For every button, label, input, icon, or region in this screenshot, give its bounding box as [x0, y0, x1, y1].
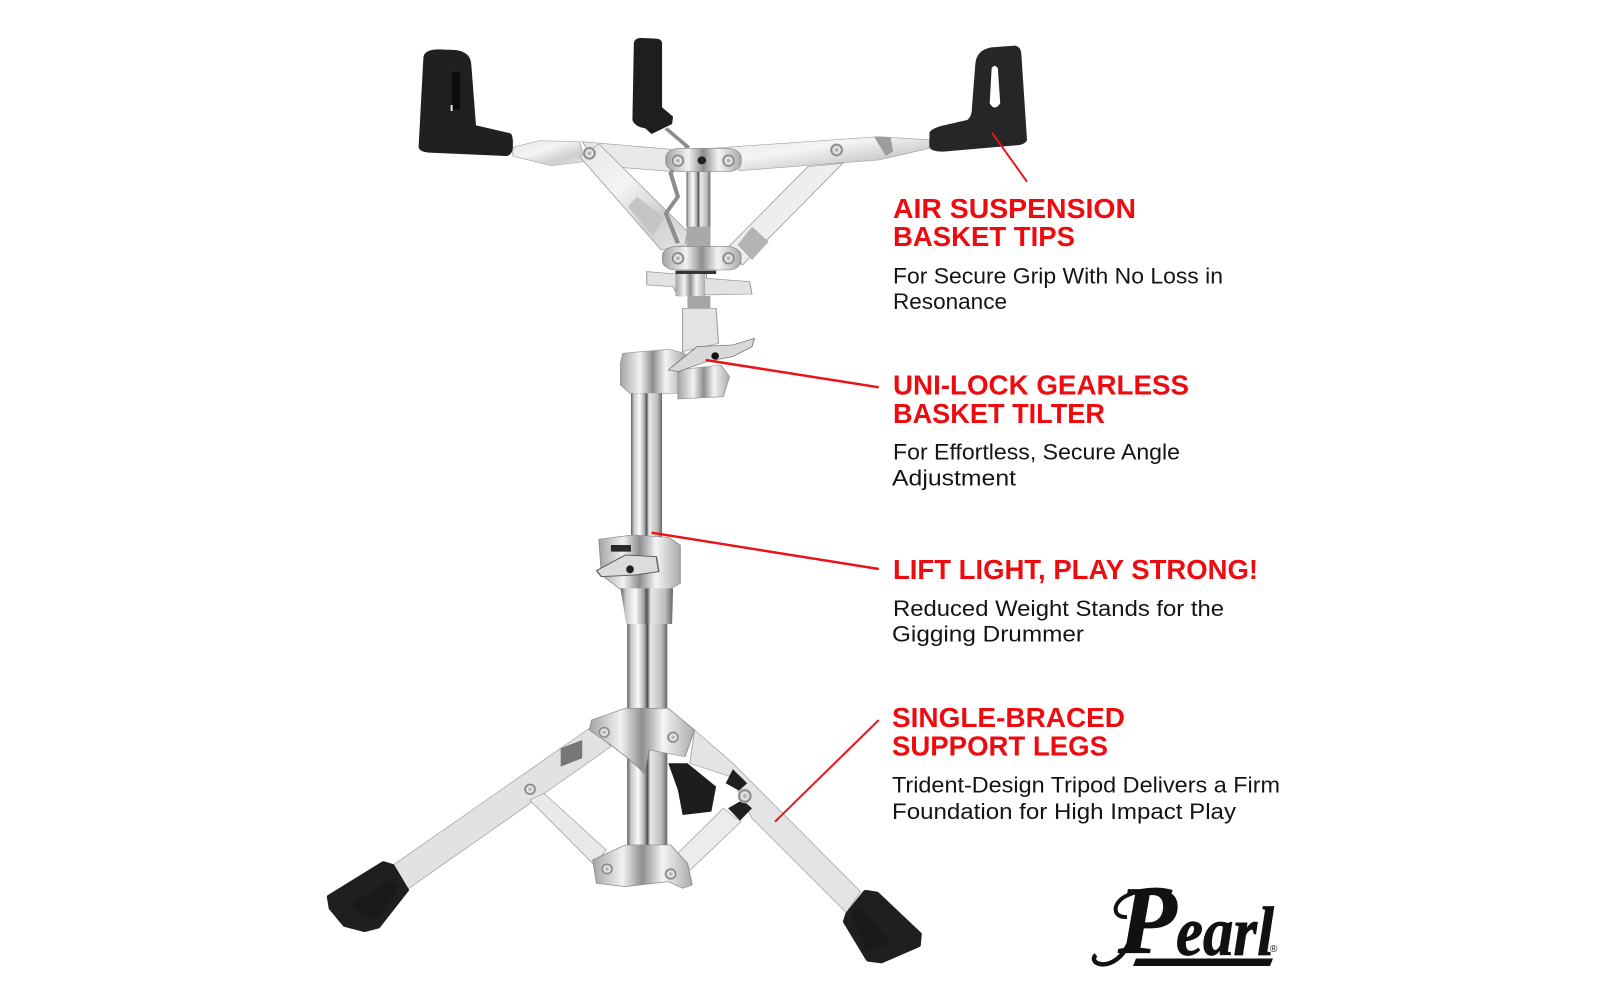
description line 2: Adjustment	[892, 466, 1016, 490]
left tip slot	[452, 72, 460, 110]
logo wordmark: earl	[1176, 894, 1274, 971]
tilter left knob	[620, 349, 685, 393]
right link reflection	[738, 227, 769, 260]
left foot	[330, 863, 406, 930]
back leg rubber tip	[668, 763, 716, 815]
middle basket tip	[632, 38, 673, 134]
Pearl logo	[1094, 867, 1278, 974]
left upper bar	[582, 142, 671, 171]
lower hub	[593, 845, 692, 888]
tilter right knob	[678, 365, 730, 399]
snare stand illustration	[330, 38, 1027, 961]
left basket tip	[419, 49, 513, 156]
callout: air suspension basket tips	[893, 193, 1223, 314]
bottom hub	[663, 247, 741, 270]
clamp bolt hole	[626, 565, 634, 573]
left foot inset	[350, 880, 398, 918]
right foot inset	[850, 908, 891, 950]
heading: UNI-LOCK GEARLESS	[893, 370, 1189, 400]
center post	[686, 170, 710, 248]
description: For Secure Grip With No Loss in	[893, 264, 1223, 288]
description: Reduced Weight Stands for the	[893, 596, 1224, 621]
logo P top swash	[1116, 890, 1172, 917]
description: For Effortless, Secure Angle	[893, 440, 1180, 464]
callout: single-braced support legs	[892, 702, 1280, 824]
registered mark: ®	[1270, 944, 1278, 955]
wing nut dark seam	[675, 271, 716, 274]
tapered collar	[620, 588, 673, 624]
pointer line: tilter	[706, 360, 879, 387]
left basket arm	[513, 141, 585, 166]
callout: lift light play strong	[892, 554, 1258, 646]
right leg	[690, 730, 861, 913]
right basket arm	[711, 137, 929, 171]
tripod bolts	[524, 726, 752, 880]
upper tube	[631, 393, 662, 500]
callout: uni-lock gearless basket tilter	[892, 370, 1189, 490]
bolts	[583, 143, 843, 265]
tilter block	[683, 308, 719, 352]
left leg reflection	[561, 740, 582, 767]
heading: SINGLE-BRACED	[892, 702, 1125, 733]
right basket link	[727, 163, 843, 265]
pointer line: lift light	[652, 533, 879, 569]
tripod hub	[589, 708, 695, 773]
left link reflection	[628, 197, 664, 235]
heading: AIR SUSPENSION	[893, 193, 1136, 224]
right brace	[678, 808, 741, 873]
logo underline bar	[1133, 958, 1273, 966]
threaded rod	[687, 296, 710, 309]
right basket tip	[929, 46, 1027, 152]
stand upper section: basket and tilter	[419, 38, 1027, 500]
heading line 2: SUPPORT LEGS	[892, 730, 1108, 762]
description line 2: Resonance	[893, 289, 1007, 314]
pointer line: basket tips	[992, 133, 1027, 182]
heading: LIFT LIGHT, PLAY STRONG!	[893, 554, 1258, 585]
spring clip	[666, 128, 687, 243]
left basket link	[580, 144, 687, 250]
clamp wing bolt	[597, 555, 659, 577]
right foot	[846, 892, 919, 961]
top hub	[666, 148, 741, 172]
logo P tail swash	[1094, 938, 1131, 964]
description line 2: Gigging Drummer	[892, 622, 1084, 646]
post thread	[686, 227, 710, 247]
right arm reflection	[874, 137, 893, 156]
top hub hole	[697, 156, 706, 164]
upper tube continued	[631, 500, 662, 541]
right tip slot	[990, 66, 1000, 107]
right leg dark reflections	[726, 769, 752, 821]
stand lower section: height clamp and tripod	[330, 500, 919, 961]
wing nut	[647, 272, 752, 296]
left tip slot light	[451, 105, 453, 111]
lever hole	[711, 352, 719, 360]
lower tube	[627, 624, 667, 847]
left brace	[530, 793, 606, 865]
logo wordmark: P	[1117, 867, 1178, 974]
heading line 2: BASKET TIPS	[893, 221, 1075, 252]
tilter lever	[668, 338, 754, 372]
height clamp	[599, 535, 680, 590]
description: Trident-Design Tripod Delivers a Firm	[892, 772, 1280, 798]
heading line 2: BASKET TILTER	[893, 398, 1105, 429]
wing nut body	[675, 274, 705, 296]
clamp dark slot	[611, 545, 631, 552]
description line 2: Foundation for High Impact Play	[892, 799, 1236, 824]
left leg	[393, 727, 611, 889]
pointer line: legs	[775, 720, 879, 822]
